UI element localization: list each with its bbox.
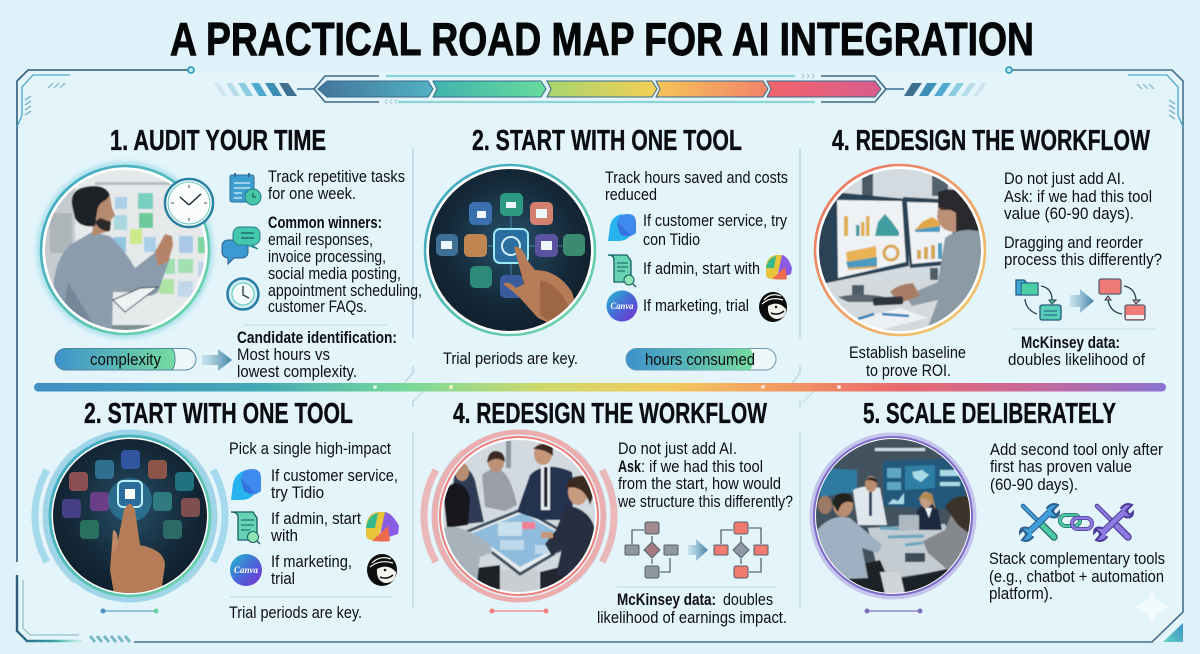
text: track hours saved: Track hours saved and costs [605,168,788,187]
text: mckinsey data: McKinsey data: [617,590,716,609]
diagram: gray workflow to red workflow [625,522,768,578]
text: common winners: social media posting, [268,264,401,283]
text: customer service: If customer service, [271,466,398,485]
text: common winners: appointment scheduling, [268,281,422,300]
scale line [490,608,548,614]
text: admin: If admin, start [271,509,361,528]
text: track tasks: Track repetitive tasks [268,167,405,186]
heading: start with one tool: 2. START WITH ONE TOOL [472,125,742,157]
heading: audit your time: 1. AUDIT YOUR TIME [110,125,326,157]
panel: 2. start with one tool (top) [425,125,792,370]
icon: document with check [608,255,636,287]
text: add second tool: (60-90 days). [990,475,1078,494]
scale line [100,608,158,614]
text: marketing: If marketing, [271,552,352,571]
text: mckinsey data: doubles [723,590,773,609]
arrow: to candidate identification [202,349,232,371]
photo: finger touching app icons [425,165,595,335]
text: do not just add AI: value (60-90 days). [1004,204,1134,223]
text: establish baseline: to prove ROI. [866,361,951,380]
icon: calendar [230,173,261,205]
pill: complexity [55,348,196,370]
text: add second tool [990,440,1163,494]
text: track hours saved [605,168,788,204]
panel: 5. scale deliberately [812,398,1165,614]
icon: canva [606,290,638,322]
text: do not just add AI [617,439,793,511]
icon: copilot [766,255,792,280]
text: trial periods: Trial periods are key. [443,349,578,368]
photo: finger pressing glowing app icon [35,432,225,600]
panel: 4. redesign the workflow (bottom) [424,398,793,627]
text: do not just add AI [1004,169,1152,223]
text: common winners: email responses, [268,230,373,249]
icon: mailchimp [367,554,397,586]
photo: man at whiteboard [40,165,210,335]
text: track tasks: for one week. [268,184,356,203]
icon: wall clock [165,179,213,227]
text: establish baseline: Establish baseline [849,343,966,362]
text: customer service [271,466,398,502]
text: add second tool: first has proven value [990,457,1132,476]
text: customer service: try Tidio [271,483,324,502]
text: customer service: con Tidio [643,230,700,249]
icon: chat bubbles [222,227,260,264]
text: admin: If admin, start with [643,259,760,278]
icon: canva: Canva [234,566,258,576]
text: common winners: Common winners: [268,213,382,232]
text: candidate identification: Most hours vs [237,345,330,364]
text: dragging and reorder [1004,233,1162,269]
photo: team at touch table [424,432,614,600]
text: customer service: If customer service, try [643,211,787,230]
text: mckinsey data: doubles likelihood of [1008,350,1145,369]
icon: canva: Canva [610,301,634,311]
text: candidate identification: lowest complexity. [237,362,357,381]
text: dragging and reorder: Dragging and reorder [1004,233,1143,252]
scale line [864,608,922,614]
text: stack tools: (e.g., chatbot + automation [989,567,1164,586]
icon: small clock [228,278,258,310]
text: dragging and reorder: process this differently? [1004,250,1162,269]
text: mckinsey data [597,590,787,627]
panel: 4. redesign the workflow (top) [815,125,1162,380]
photo: analyst at dashboards [815,165,985,335]
text: stack tools: platform). [989,584,1053,603]
text: do not just add AI: Do not just add AI. [618,439,737,458]
icon: copilot [366,512,399,542]
text: establish baseline [849,343,966,380]
text: do not just add AI: from the start, how would [618,474,781,493]
panel: 2. start with one tool (bottom) [35,398,399,622]
text: do not just add AI: Ask [618,457,641,476]
text: candidate identification [237,328,397,381]
pill: hours consumed: hours consumed [645,350,755,369]
text: marketing [271,552,352,588]
heading: redesign the workflow: 4. REDESIGN THE WORKFLOW [453,398,767,430]
text: pick a single tool: Pick a single high-impact [229,439,391,458]
icon: document with check [231,512,260,544]
text: admin [270,509,361,545]
panel: 1. audit your time [40,125,422,381]
text: stack tools: Stack complementary tools [989,549,1165,568]
heading: start with one tool: 2. START WITH ONE TOOL [84,398,353,430]
text: common winners: customer FAQs. [268,297,367,316]
icon: tidio [231,469,261,500]
header progress bar [214,74,987,104]
text: common winners: invoice processing, [268,247,386,266]
text: track tasks [268,167,405,203]
text: do not just add AI: Ask: if we had this tool [1004,187,1152,206]
text: do not just add AI: Do not just add AI. [1004,169,1125,188]
text: track hours saved: reduced [605,185,657,204]
icon: folder reorder [1016,279,1145,320]
icon: canva [230,554,262,586]
icon: tidio [608,214,636,241]
text: marketing: If marketing, trial [643,296,749,315]
text: stack tools [989,549,1165,603]
pill: complexity: complexity [90,350,161,369]
text: customer service [643,211,787,249]
text: mckinsey data: likelihood of earnings impact. [597,608,787,627]
icon: linked tools [1020,504,1133,541]
rainbow divider bar [34,383,1166,392]
text: trial periods: Trial periods are key. [229,603,362,622]
icon: mailchimp [759,292,787,322]
text: candidate identification: Candidate identification: [237,328,397,347]
text: marketing: trial [271,569,295,588]
column dividers [393,148,820,607]
text: mckinsey data: McKinsey data: [1021,333,1120,352]
photo: team in operations room [812,435,974,597]
text: common winners [268,213,422,316]
text: do not just add AI: we structure this differently? [617,492,793,511]
text: do not just add AI: : if we had this tool [641,457,763,476]
text: add second tool: Add second tool only after [990,440,1163,459]
text: admin: with [270,526,298,545]
text: mckinsey data [1008,333,1145,369]
